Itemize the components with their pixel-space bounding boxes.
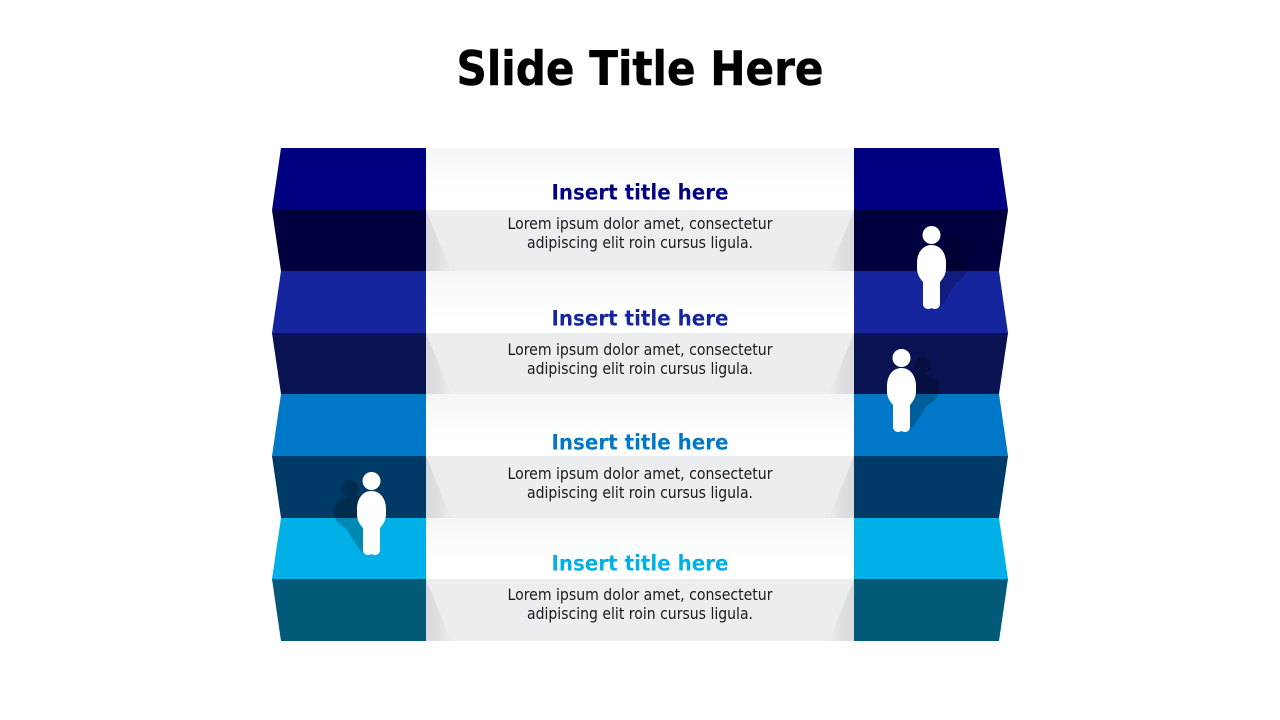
step 1 xyxy=(272,148,1008,271)
panel shadow right: step 4 xyxy=(829,579,854,641)
panel shadow left: step 2 xyxy=(426,333,451,394)
text: step 4: Lorem ipsum dolor amet, consectetur xyxy=(508,585,773,604)
text: step 2: Lorem ipsum dolor amet, consectetur xyxy=(508,340,773,359)
centre panel top: step 3 xyxy=(426,394,854,456)
left fold: step 3 xyxy=(272,394,426,456)
panel shadow left: step 4 xyxy=(426,579,451,641)
right fold: step 3 xyxy=(854,394,1008,456)
centre panel top: step 1 xyxy=(426,148,854,210)
title: Slide Title Here xyxy=(456,42,824,97)
text: step 1 xyxy=(508,214,773,252)
right fold: step 4 xyxy=(854,518,1008,579)
left fold: step 2 xyxy=(272,271,426,333)
centre panel top: step 2 xyxy=(426,271,854,333)
text: step 3: adipiscing elit roin cursus ligula. xyxy=(527,483,753,502)
panel shadow right: step 1 xyxy=(829,210,854,271)
panel shadow right: step 3 xyxy=(829,456,854,518)
centre panel bottom: step 2 xyxy=(426,333,854,394)
right fold shade: step 3 xyxy=(854,456,1008,518)
icon: person on step 1 xyxy=(917,226,968,309)
heading: step 3: Insert title here xyxy=(552,430,728,456)
right fold: step 2 xyxy=(854,271,1008,333)
left fold shade: step 4 xyxy=(272,579,426,641)
left fold shade: step 2 xyxy=(272,333,426,394)
centre panel top: step 4 xyxy=(426,518,854,579)
panel shadow left: step 1 xyxy=(426,210,451,271)
text: step 3 xyxy=(508,464,773,502)
left fold shade: step 3 xyxy=(272,456,426,518)
right fold: step 1 xyxy=(854,148,1008,210)
icon: person on step 2 xyxy=(887,349,940,432)
panel shadow left: step 3 xyxy=(426,456,451,518)
right fold shade: step 1 xyxy=(854,210,1008,271)
text: step 1: Lorem ipsum dolor amet, consectetur xyxy=(508,214,773,233)
heading: step 1: Insert title here xyxy=(552,180,728,206)
text: step 2: adipiscing elit roin cursus ligula. xyxy=(527,359,753,378)
panel shadow right: step 2 xyxy=(829,333,854,394)
text: step 4: adipiscing elit roin cursus ligula. xyxy=(527,604,753,623)
step 3 xyxy=(272,394,1008,518)
centre panel bottom: step 3 xyxy=(426,456,854,518)
centre panel bottom: step 1 xyxy=(426,210,854,271)
text: step 1: adipiscing elit roin cursus ligula. xyxy=(527,233,753,252)
step 2 xyxy=(272,271,1008,394)
heading: step 2: Insert title here xyxy=(552,306,728,332)
text: step 4 xyxy=(508,585,773,623)
left fold shade: step 1 xyxy=(272,210,426,271)
left fold: step 4 xyxy=(272,518,426,579)
step 4 xyxy=(272,518,1008,641)
icon: person on step 3 xyxy=(334,472,386,555)
text: step 2 xyxy=(508,340,773,378)
text: step 3: Lorem ipsum dolor amet, consectetur xyxy=(508,464,773,483)
left fold: step 1 xyxy=(272,148,426,210)
centre panel bottom: step 4 xyxy=(426,579,854,641)
heading: step 4: Insert title here xyxy=(552,552,728,576)
right fold shade: step 4 xyxy=(854,579,1008,641)
right fold shade: step 2 xyxy=(854,333,1008,394)
